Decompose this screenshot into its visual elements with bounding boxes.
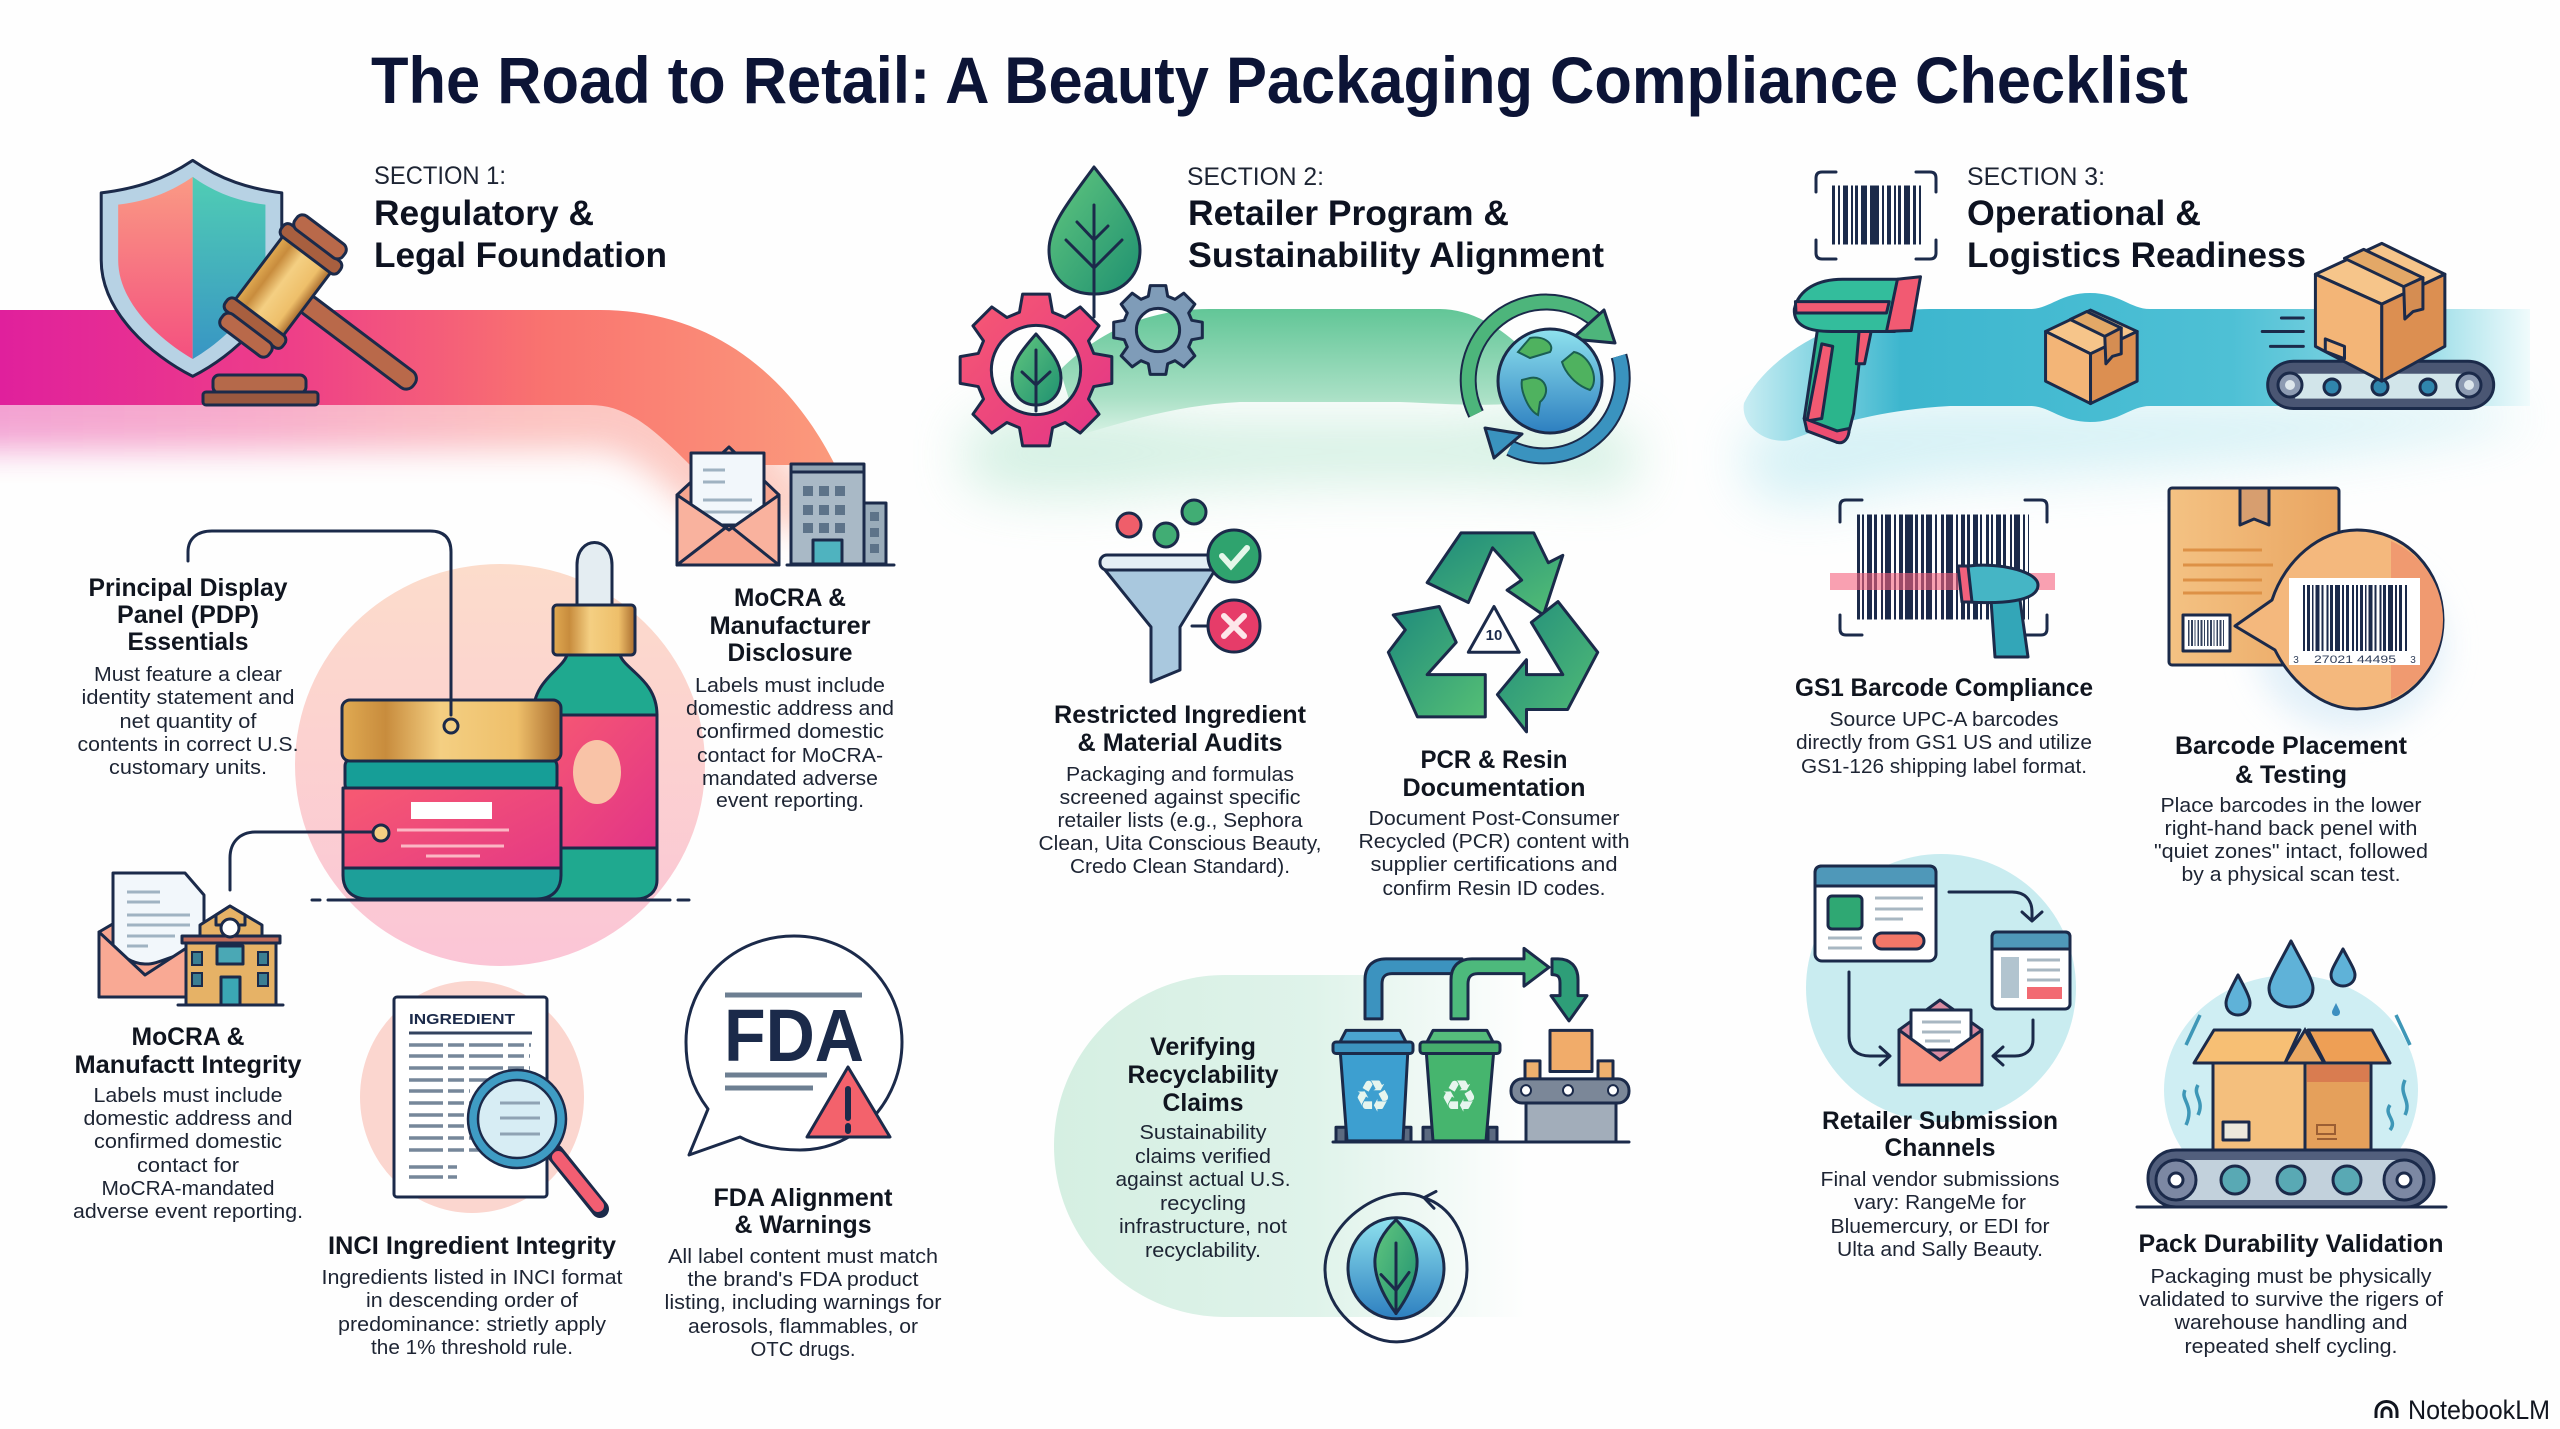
item: barcode placement and testing: by a physical scan test.: [2182, 863, 2400, 886]
item: verifying recyclability claims: [1054, 948, 1629, 1342]
item: MoCRA and manufactt integrity: Manufactt Integrity: [74, 1051, 302, 1079]
icon: envelope and office building: [677, 447, 894, 565]
icon: funnel with check and cross: [1100, 500, 1260, 682]
icon: FDA speech bubble with warning: [686, 936, 902, 1155]
item: verifying recyclability claims: recyclability.: [1145, 1239, 1261, 1262]
item: restricted ingredient and material audits: Clean, Uita Conscious Beauty,: [1038, 832, 1322, 855]
item: restricted ingredient and material audits: Restricted Ingredient: [1054, 701, 1307, 729]
icon: barcode in frame: [1816, 172, 1936, 259]
item: principal display panel: contents in correct U.S.: [78, 733, 298, 756]
item: MoCRA and manufactt integrity: MoCRA &: [132, 1023, 244, 1051]
item: GS1 barcode compliance: Source UPC-A barcodes: [1830, 708, 2058, 731]
section 2 heading: [1187, 163, 1604, 275]
item: principal display panel: net quantity of: [120, 710, 257, 733]
item: principal display panel: Panel (PDP): [117, 601, 259, 629]
section 1 heading: [374, 162, 667, 275]
panel: section 1 regulatory and legal foundation: [0, 160, 942, 1361]
item: FDA alignment and warnings: [664, 936, 942, 1361]
icon: small parcel: [2046, 310, 2137, 404]
ribbon: section 1: [0, 310, 850, 540]
section 3 heading: SECTION 3:: [1967, 163, 2105, 191]
item: barcode placement and testing: right-hand back penel with: [2164, 817, 2418, 840]
panel: section 2 retailer program and sustainability: [960, 163, 1640, 1342]
background circle: [295, 564, 705, 966]
item: MoCRA and manufactt integrity: domestic address and: [84, 1107, 292, 1130]
icon: FDA speech bubble with warning: FDA: [724, 994, 864, 1077]
item: verifying recyclability claims: Verifying: [1150, 1033, 1256, 1061]
item: verifying recyclability claims: Recyclability: [1128, 1061, 1279, 1089]
item: PCR and resin documentation: Documentation: [1402, 774, 1586, 802]
item: pack durability validation: [2137, 941, 2446, 1358]
item: INCI ingredient integrity: [322, 981, 623, 1359]
section 2 heading: SECTION 2:: [1187, 163, 1324, 191]
item: FDA alignment and warnings: listing, including warnings for: [664, 1291, 942, 1314]
dropper bottle: [533, 542, 657, 899]
item: MoCRA and manufactt integrity: Labels must include: [94, 1084, 282, 1107]
item: FDA alignment and warnings: the brand's FDA product: [688, 1268, 919, 1291]
item: retailer submission channels: Channels: [1884, 1134, 1996, 1162]
item: PCR and resin documentation: PCR & Resin: [1420, 746, 1568, 774]
item: barcode placement and testing: & Testing: [2235, 761, 2347, 789]
item: verifying recyclability claims: infrastructure, not: [1119, 1215, 1287, 1238]
item: MoCRA and manufacturer disclosure: Disclosure: [728, 639, 853, 667]
item: MoCRA and manufactt integrity: contact for: [137, 1154, 239, 1177]
illustration: jar and dropper bottle: [188, 531, 705, 966]
section 2 heading: Sustainability Alignment: [1188, 236, 1604, 275]
item: verifying recyclability claims: recycling: [1160, 1192, 1246, 1215]
item: retailer submission channels: Ulta and Sally Beauty.: [1837, 1238, 2043, 1261]
cream jar: [342, 700, 561, 899]
section 1 heading: SECTION 1:: [374, 162, 506, 190]
item: INCI ingredient integrity: Ingredients listed in INCI format: [322, 1266, 623, 1289]
icon: handheld scanner: [1794, 277, 1920, 443]
item: GS1 barcode compliance: GS1 Barcode Compliance: [1795, 674, 2093, 702]
item: INCI ingredient integrity: INCI Ingredient Integrity: [328, 1232, 616, 1260]
item: restricted ingredient and material audits: & Material Audits: [1078, 729, 1282, 757]
item: principal display panel: customary units.: [109, 756, 267, 779]
item: MoCRA and manufactt integrity: MoCRA-mandated: [102, 1177, 274, 1200]
icon: envelope and town hall: [99, 873, 283, 1005]
NotebookLM watermark: NotebookLM: [2408, 1395, 2550, 1425]
item: FDA alignment and warnings: OTC drugs.: [750, 1338, 856, 1361]
icon: shield and gavel: [101, 160, 456, 441]
item: MoCRA and manufactt integrity: [73, 873, 303, 1223]
item: GS1 barcode compliance: GS1-126 shipping label format.: [1801, 755, 2087, 778]
item: retailer submission channels: Bluemercury, or EDI for: [1830, 1215, 2050, 1238]
item: MoCRA and manufacturer disclosure: MoCRA &: [734, 584, 846, 612]
panel: section 3 operational and logistics readiness: [1740, 163, 2530, 1358]
item: MoCRA and manufacturer disclosure: Labels must include: [695, 674, 885, 697]
item: verifying recyclability claims: against actual U.S.: [1116, 1168, 1290, 1191]
item: restricted ingredient and material audits: Packaging and formulas: [1066, 763, 1294, 786]
icon: large parcel on conveyor: [2262, 243, 2494, 409]
item: pack durability validation: repeated shelf cycling.: [2184, 1335, 2398, 1358]
icon: leaf and gears: [960, 167, 1202, 446]
item: verifying recyclability claims: Sustainability: [1140, 1121, 1267, 1144]
icon: carton with barcode callout: [2169, 488, 2445, 730]
item: retailer submission channels: Final vendor submissions: [1820, 1168, 2060, 1191]
item: restricted ingredient and material audits: retailer lists (e.g., Sephora: [1058, 809, 1303, 832]
item: restricted ingredient and material audits: screened against specific: [1060, 786, 1300, 809]
item: PCR and resin documentation: Document Post-Consumer: [1368, 807, 1620, 830]
section 3 heading: Operational &: [1967, 194, 2201, 233]
item: principal display panel: Must feature a clear: [94, 663, 282, 686]
item: MoCRA and manufactt integrity: adverse event reporting.: [73, 1200, 303, 1223]
icon: barcode scanner with laser: [1830, 500, 2055, 657]
item: barcode placement and testing: Barcode Placement: [2175, 732, 2408, 760]
item: barcode placement and testing: "quiet zones" intact, followed: [2154, 840, 2428, 863]
item: MoCRA and manufacturer disclosure: confirmed domestic: [696, 720, 884, 743]
item: FDA alignment and warnings: & Warnings: [734, 1211, 872, 1239]
item: FDA alignment and warnings: FDA Alignment: [714, 1184, 893, 1212]
item: PCR and resin documentation: [1358, 533, 1630, 900]
item: principal display panel: Principal Display: [88, 574, 288, 602]
item: INCI ingredient integrity: the 1% threshold rule.: [371, 1336, 573, 1359]
item: MoCRA and manufacturer disclosure: Manufacturer: [710, 612, 871, 640]
item: MoCRA and manufacturer disclosure: contact for MoCRA-: [697, 744, 883, 767]
icon: ingredient document with magnifier: INGREDIENT: [409, 1011, 515, 1028]
icon: carton with barcode callout: 3: [2410, 655, 2416, 666]
section 3 heading: Logistics Readiness: [1967, 236, 2306, 275]
icon: carton on conveyor with water drops: [2137, 941, 2446, 1207]
item: MoCRA and manufacturer disclosure: mandated adverse: [702, 767, 878, 790]
item: retailer submission channels: vary: RangeMe for: [1854, 1191, 2026, 1214]
item: principal display panel: identity statement and: [82, 686, 294, 709]
section 3 heading: [1967, 163, 2306, 275]
icon: carton with barcode callout: 3: [2293, 655, 2299, 666]
connector: MoCRA: [230, 832, 372, 890]
item: barcode placement and testing: [2154, 488, 2445, 886]
icon: recycling triangle with resin code: 10: [1486, 627, 1502, 644]
item: FDA alignment and warnings: aerosols, flammables, or: [688, 1315, 918, 1338]
item: GS1 barcode compliance: directly from GS1 US and utilize: [1796, 731, 2092, 754]
item: MoCRA and manufacturer disclosure: domestic address and: [686, 697, 894, 720]
item: pack durability validation: validated to survive the rigers of: [2139, 1288, 2443, 1311]
section 2 heading: Retailer Program &: [1188, 194, 1509, 233]
title: The Road to Retail: A Beauty Packaging Compliance Checklist: [371, 43, 2188, 117]
item: PCR and resin documentation: supplier certifications and: [1370, 853, 1618, 876]
icon: leaf globe with cycle ring: [1325, 1191, 1467, 1342]
item: INCI ingredient integrity: predominance: strietly apply: [338, 1313, 607, 1336]
icon: portal windows and envelope: [1806, 854, 2076, 1122]
item: PCR and resin documentation: confirm Resin ID codes.: [1382, 877, 1606, 900]
panel background: [1054, 975, 1527, 1317]
item: principal display panel: [78, 574, 298, 779]
icon: recycling bins and conveyor: ♻: [1354, 1072, 1392, 1122]
ribbon: section 2: [965, 309, 1640, 497]
item: restricted ingredient and material audits: [1038, 500, 1322, 878]
ground line: [312, 898, 689, 902]
item: pack durability validation: Packaging must be physically: [2150, 1265, 2432, 1288]
item: MoCRA and manufacturer disclosure: [677, 447, 894, 812]
item: MoCRA and manufactt integrity: confirmed domestic: [94, 1130, 282, 1153]
item: retailer submission channels: Retailer Submission: [1822, 1107, 2058, 1135]
connector: PDP: [188, 531, 451, 715]
icon: recycling triangle with resin code: [1388, 533, 1598, 732]
item: PCR and resin documentation: Recycled (PCR) content with: [1358, 830, 1630, 853]
item: barcode placement and testing: Place barcodes in the lower: [2160, 794, 2422, 817]
item: MoCRA and manufacturer disclosure: event reporting.: [716, 789, 864, 812]
item: INCI ingredient integrity: in descending order of: [366, 1289, 578, 1312]
item: pack durability validation: warehouse handling and: [2173, 1311, 2408, 1334]
item: verifying recyclability claims: Claims: [1162, 1089, 1244, 1117]
item: restricted ingredient and material audits: Credo Clean Standard).: [1070, 855, 1290, 878]
item: pack durability validation: Pack Durability Validation: [2138, 1230, 2444, 1258]
icon: carton with barcode callout: 27021 44495: [2314, 654, 2396, 666]
icon: recycling bins and conveyor: ♻: [1440, 1072, 1478, 1122]
icon: recycling bins and conveyor: [1333, 948, 1629, 1142]
item: GS1 barcode compliance: [1795, 500, 2093, 778]
section 1 heading: Legal Foundation: [374, 236, 667, 275]
item: verifying recyclability claims: claims verified: [1135, 1145, 1271, 1168]
item: principal display panel: Essentials: [128, 628, 248, 656]
section 1 heading: Regulatory &: [374, 194, 594, 233]
icon: globe with cycle arrows: [1468, 302, 1622, 458]
item: retailer submission channels: [1806, 854, 2076, 1261]
ribbon: section 3: [1740, 293, 2530, 503]
item: FDA alignment and warnings: All label content must match: [668, 1245, 938, 1268]
icon: ingredient document with magnifier: [360, 981, 600, 1213]
